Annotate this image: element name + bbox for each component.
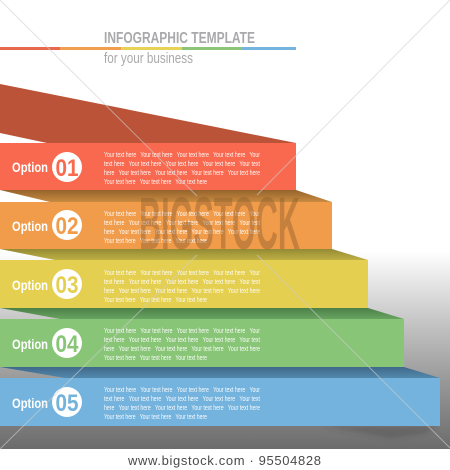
panel: option 1: 01 <box>56 155 78 182</box>
panel: option 1: here Your text here Your text here Your text here Your text here <box>104 170 260 177</box>
panel: option 4 <box>0 308 404 367</box>
panel: option 4: here Your text here Your text here Your text here Your text here <box>104 346 260 353</box>
panel: option 5: Your text here Your text here Your text here <box>104 414 207 421</box>
panel: option 3: Your text here Your text here Your text here <box>104 297 207 304</box>
panel: option 2 <box>0 190 332 249</box>
panel: option 4: Your text here Your text here Your text here Your text here Your <box>104 328 260 335</box>
panel: option 2: text here Your text here Your text here Your text here Your text <box>104 220 260 227</box>
panel: option 2: Your text here Your text here Your text here <box>104 238 207 245</box>
panel: option 5: 05 <box>56 390 78 417</box>
shadow under option 5 <box>320 426 438 438</box>
panel: option 3: Your text here Your text here Your text here Your text here Your <box>104 270 260 277</box>
panel: option 1: Option <box>12 159 48 175</box>
panel: option 1: Your text here Your text here Your text here Your text here Your <box>104 152 260 159</box>
rainbow rule <box>0 47 296 50</box>
panel: option 3 <box>0 249 368 308</box>
panel: option 4: Option <box>12 336 48 352</box>
panel: option 3: 03 <box>56 272 78 299</box>
panel: option 1 <box>0 84 296 190</box>
panel: option 3: text here Your text here Your text here Your text here Your text <box>104 279 260 286</box>
panel: option 5 <box>0 367 440 426</box>
panel: option 2: Your text here Your text here Your text here Your text here Your <box>104 211 260 218</box>
panel: option 3: Option <box>12 277 48 293</box>
panel: option 5: Your text here Your text here Your text here Your text here Your <box>104 387 260 394</box>
panel: option 1: text here Your text here Your text here Your text here Your text <box>104 161 260 168</box>
panel: option 5: here Your text here Your text here Your text here Your text here <box>104 405 260 412</box>
panel: option 4: Your text here Your text here Your text here <box>104 355 207 362</box>
panel: option 1: Your text here Your text here Your text here <box>104 179 207 186</box>
subtitle: for your business <box>104 50 193 67</box>
panel: option 2: Option <box>12 218 48 234</box>
title: INFOGRAPHIC TEMPLATE <box>104 30 255 47</box>
panel: option 4: 04 <box>56 331 79 358</box>
panel: option 4: text here Your text here Your text here Your text here Your text <box>104 337 260 344</box>
panel: option 3: here Your text here Your text here Your text here Your text here <box>104 288 260 295</box>
footer credit: www.bigstock.com · 95504828 <box>127 453 321 468</box>
panel: option 5: text here Your text here Your text here Your text here Your text <box>104 396 260 403</box>
panel: option 2: here Your text here Your text here Your text here Your text here <box>104 229 260 236</box>
panel: option 5: Option <box>12 395 48 411</box>
panel: option 2: 02 <box>56 213 78 240</box>
